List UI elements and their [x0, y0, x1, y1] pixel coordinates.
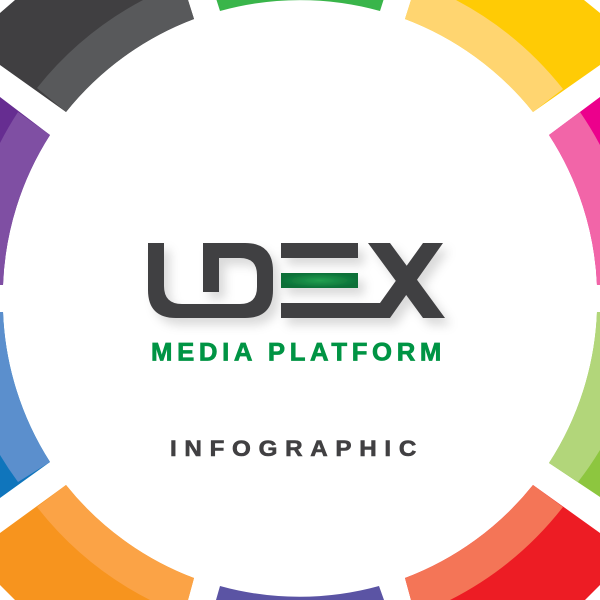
segment: dark grey top-left [0, 0, 194, 112]
letter E green middle bar [281, 273, 358, 288]
segment: purple left [0, 97, 50, 285]
letter E top bar [281, 243, 358, 258]
segment: red bottom-right [405, 485, 600, 600]
letter E bottom bar and letter X [281, 243, 445, 318]
letters U and D [148, 243, 273, 318]
segment: lime right [549, 312, 600, 497]
label: infographic: INFOGRAPHIC [170, 436, 424, 461]
segment: yellow top-right [405, 0, 600, 112]
segment: green top [216, 0, 384, 11]
segment: pink right [549, 97, 600, 285]
logo: UDEX [148, 243, 445, 318]
segment: blue left [0, 312, 50, 498]
segment: orange bottom-left [0, 485, 194, 600]
segment: indigo bottom [216, 586, 384, 600]
subtitle: media platform: MEDIA PLATFORM [151, 338, 446, 366]
